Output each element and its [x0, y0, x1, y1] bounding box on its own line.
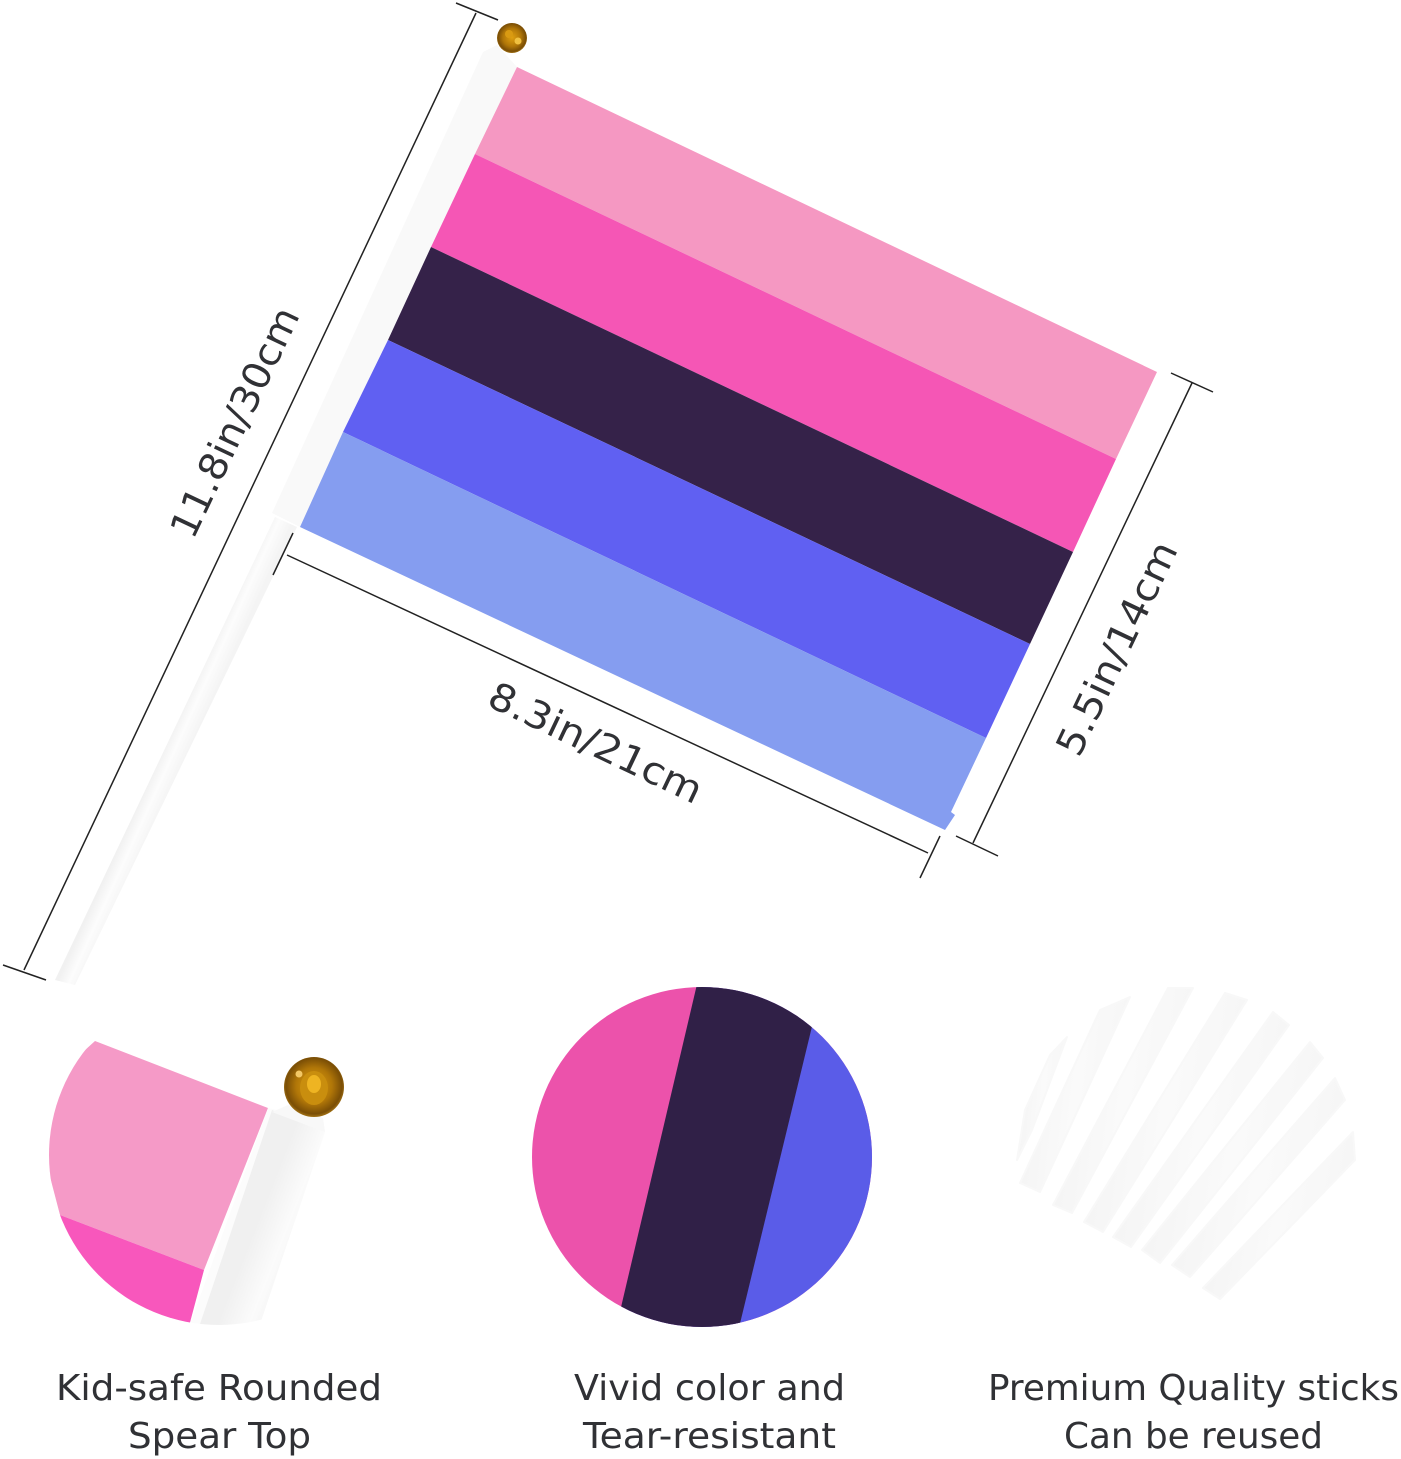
caption: vivid colour: Vivid color and	[574, 1368, 845, 1409]
stick neck	[272, 1105, 325, 1132]
gold ball close-up	[284, 1057, 344, 1117]
caption: vivid colour: Tear-resistant	[582, 1416, 836, 1457]
dimension: stick height	[3, 3, 498, 980]
flag pole	[55, 45, 517, 985]
label: flag width: 8.3in/21cm	[481, 673, 710, 813]
caption: spear top: Spear Top	[128, 1416, 311, 1457]
caption: sticks: Premium Quality sticks	[988, 1368, 1399, 1409]
flag stripes	[300, 67, 1157, 830]
caption: sticks	[988, 1368, 1399, 1457]
detail circle: rounded spear top	[30, 1041, 344, 1330]
caption: spear top	[56, 1368, 382, 1457]
main flag with stick	[55, 23, 1157, 985]
caption: spear top: Kid-safe Rounded	[56, 1368, 382, 1409]
detail circle: vivid colour	[532, 987, 872, 1327]
caption: sticks: Can be reused	[1064, 1416, 1323, 1457]
label: stick height: 11.8in/30cm	[161, 300, 308, 545]
caption: vivid colour	[574, 1368, 845, 1457]
flag close-up colours	[49, 1041, 268, 1322]
dimension: flag height	[956, 373, 1213, 856]
flag finial: gold ball	[497, 23, 527, 53]
stick close-up	[200, 1108, 314, 1325]
label: flag height: 5.5in/14cm	[1047, 534, 1187, 763]
dimension: flag width	[273, 533, 940, 878]
detail circle: reusable sticks	[1017, 988, 1355, 1299]
